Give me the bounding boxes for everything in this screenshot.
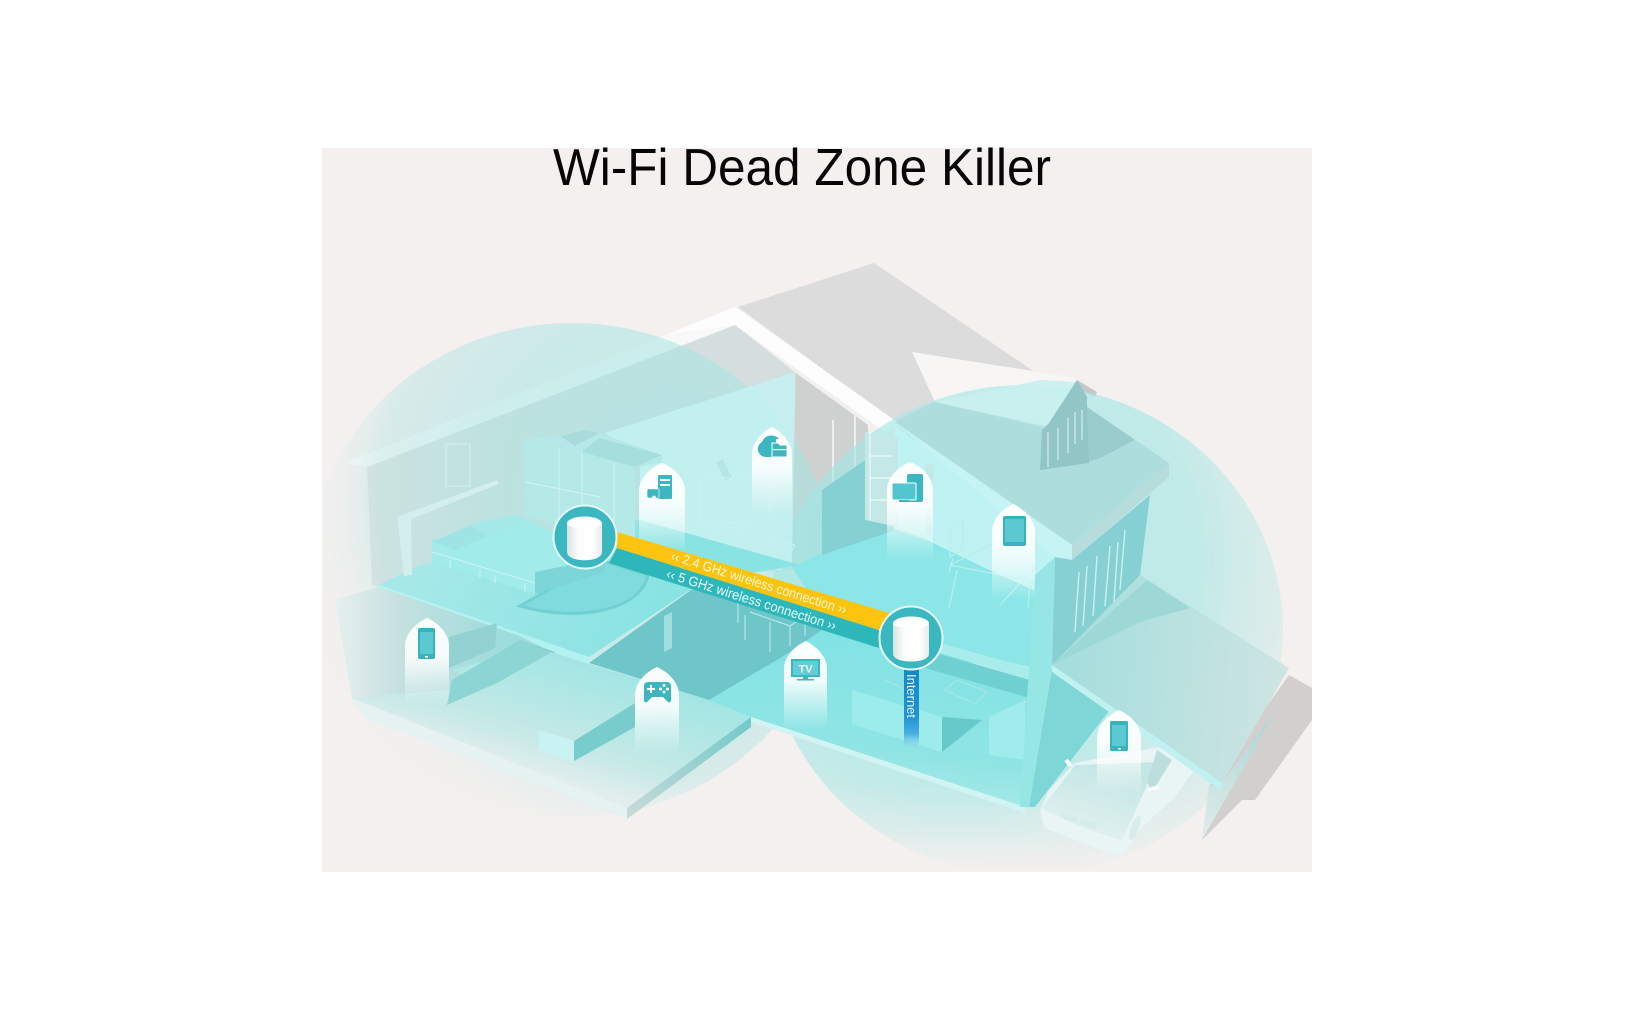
gray garage shadow — [1202, 675, 1312, 840]
stairs and sofa — [447, 623, 552, 705]
band: Internet: Internet — [904, 674, 919, 718]
signal bubble: right router — [767, 385, 1283, 875]
ground floor left plate — [352, 652, 751, 808]
lower right room furniture — [852, 680, 1030, 760]
ground floor right plate — [709, 630, 1030, 807]
pin: phone — [405, 618, 449, 705]
pin: phone by car — [1097, 710, 1141, 793]
dormer cap — [1076, 380, 1097, 397]
white ridge strip — [665, 307, 900, 432]
under garage wall — [1029, 668, 1112, 807]
gray rear roof — [738, 263, 1045, 428]
roof shadow from wall — [1052, 580, 1190, 665]
background panel — [322, 148, 1312, 872]
upper roof light facet — [936, 380, 1076, 420]
garage wall — [1202, 712, 1275, 840]
dormer shadow — [1087, 407, 1134, 462]
table and chair — [948, 551, 1030, 608]
dining furniture — [737, 604, 806, 652]
partition shadow — [822, 458, 895, 555]
garage roof — [1052, 575, 1289, 783]
pin: TV: TV — [798, 664, 813, 676]
pin: tablet — [992, 504, 1035, 600]
upper right floor — [792, 529, 1034, 666]
garage roof eave — [1052, 665, 1222, 790]
white roof triangle — [912, 352, 1047, 402]
pin: gaming PC — [639, 463, 685, 553]
band: Internet — [904, 668, 919, 748]
house illustration — [310, 263, 1312, 875]
band: 2.4 GHz connection — [617, 532, 889, 630]
wall picture frame — [446, 444, 470, 486]
lower left wall — [335, 587, 552, 698]
left roof band — [345, 325, 735, 467]
band: 5 GHz connection — [609, 548, 879, 648]
light rear wall — [605, 372, 795, 567]
bookcase — [865, 432, 934, 536]
bed — [432, 515, 586, 594]
low block — [539, 703, 635, 761]
roof surface — [895, 402, 1169, 545]
right exterior wall — [1052, 495, 1150, 665]
gray partition wall — [794, 373, 868, 518]
floor slab band — [925, 654, 1028, 697]
shelf and desk — [716, 459, 796, 570]
title: Wi-Fi Dead Zone Killer — [553, 139, 1051, 197]
light right room wall — [894, 426, 1054, 590]
pin: computer — [887, 462, 933, 560]
rug — [520, 560, 648, 613]
headboard — [397, 480, 499, 576]
router: left — [554, 506, 616, 568]
router: right — [880, 606, 942, 670]
pin: cloud storage — [752, 427, 792, 515]
dark central void — [589, 580, 822, 700]
signal bubble: left router — [310, 323, 834, 817]
device pins — [405, 427, 1141, 793]
band: 2.4 GHz connection: ‹‹ 2.4 GHz wireless connection ›› — [669, 548, 848, 617]
upper left floor — [379, 520, 800, 657]
pin: gamepad — [635, 667, 679, 753]
dormer — [1040, 380, 1089, 470]
pillar — [519, 640, 555, 652]
wall column — [1020, 557, 1055, 807]
pin: TV — [784, 641, 827, 730]
band: 5 GHz connection: ‹‹ 5 GHz wireless connection ›› — [665, 566, 838, 633]
roof eave — [1072, 463, 1169, 560]
car — [1040, 747, 1194, 855]
wardrobe — [524, 430, 662, 540]
gray back wall — [367, 325, 796, 592]
